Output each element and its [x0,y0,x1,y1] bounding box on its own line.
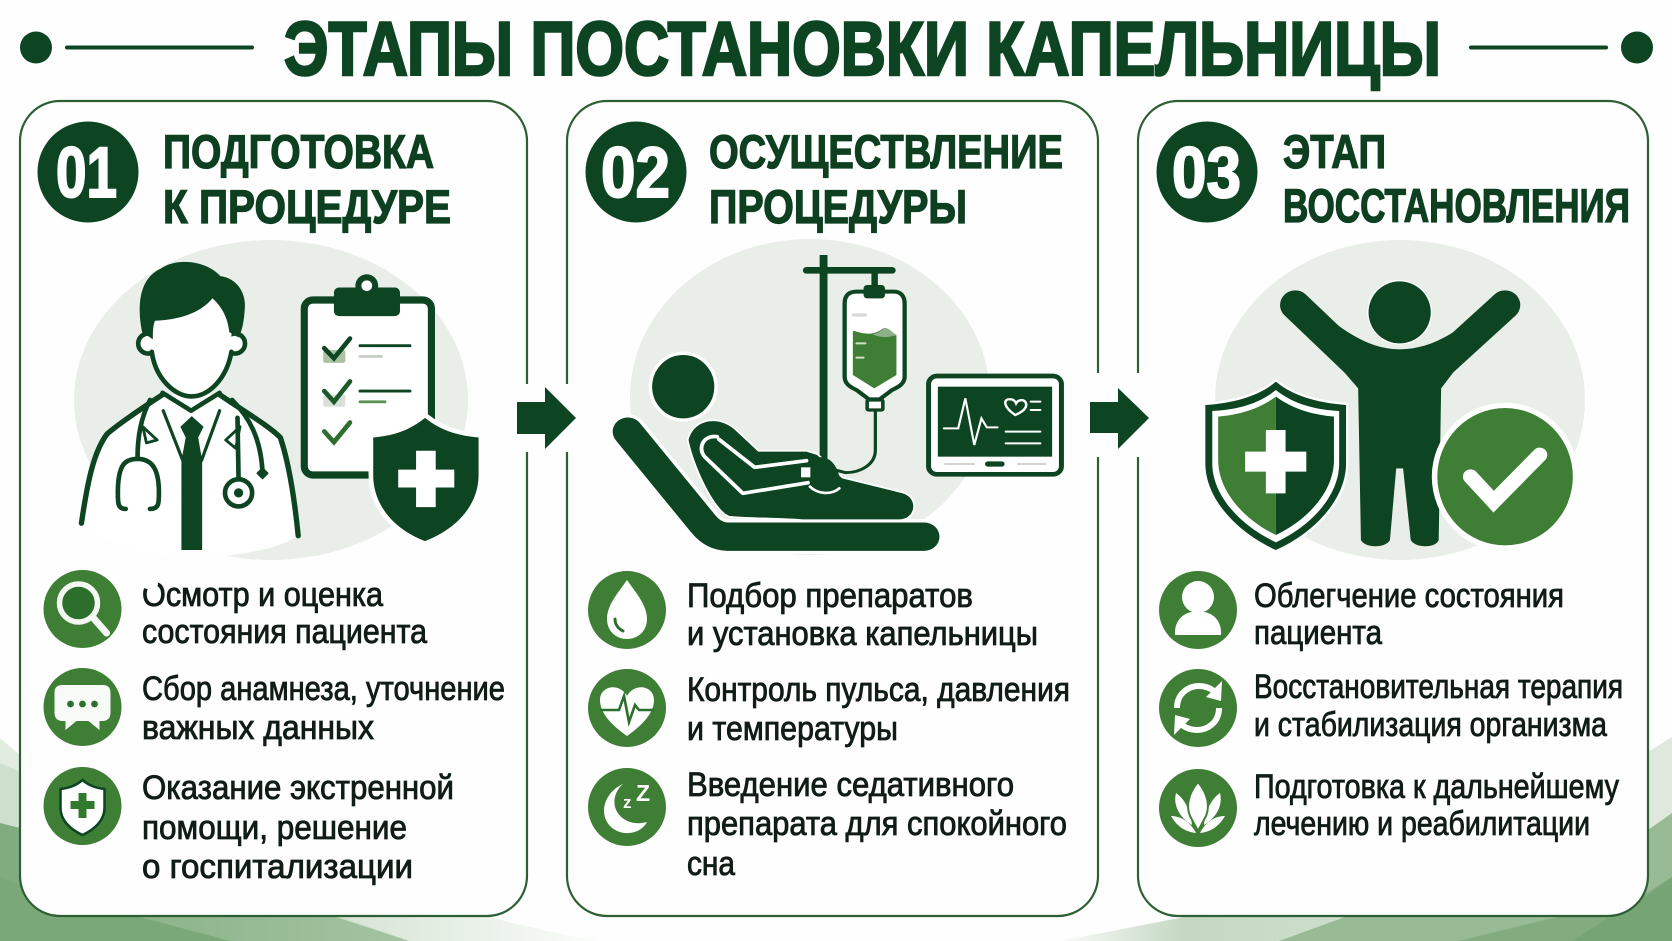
item 1 text [687,577,1038,653]
illustration: doctor [81,262,298,557]
illustration: check badge [1432,403,1578,551]
item 3 text [1254,768,1619,843]
item 1 icon: drop [588,571,666,649]
step badge 01 [38,122,138,222]
step badge 03 [1156,122,1258,222]
item 3 text: помощи, решение [142,809,407,847]
title ornament right [1469,32,1653,64]
item 2 icon: refresh [1159,669,1237,747]
item 1 text: и установка капельницы [687,615,1038,653]
item 2 text [687,671,1070,748]
title ornament left [20,32,254,64]
step badge 02 [586,122,686,222]
item 3 text [142,769,454,886]
item 3 text: Оказание экстренной [142,769,454,807]
heading: preparation: ПОДГОТОВКА [163,125,434,178]
item 1 icon: person [1159,571,1237,649]
heading: procedure [709,125,1063,233]
arrow: step 1 to 2 [514,384,581,452]
item 2 text: Контроль пульса, давления [687,671,1070,709]
illustration: shield with cross [373,418,479,541]
item 3 icon: moon and sleep: Z [636,780,650,806]
item 2 text: важных данных [142,709,374,747]
item 1 text: Подбор препаратов [687,577,973,615]
item 2 text [142,670,505,747]
item 3 text: о госпитализации [142,848,413,886]
item 1 text: пациента [1254,614,1382,652]
item 1 text: состояния пациента [142,613,427,651]
item 1 text [140,576,427,651]
item 2 text: и стабилизация организма [1254,706,1607,744]
heading: recovery [1283,125,1630,232]
item 1 text: Облегчение состояния [1254,577,1564,615]
illustration: patient with IV drip [628,255,924,537]
item 3 text: лечению и реабилитации [1254,805,1590,843]
illustration backdrop [630,239,990,555]
item 2 text: Сбор анамнеза, уточнение [142,670,505,708]
step badge 01: 01 [56,134,117,213]
heading: preparation: К ПРОЦЕДУРЕ [163,180,451,233]
item 2 text: и температуры [687,710,898,748]
title [20,7,1653,92]
item 1 icon: magnifier [44,570,122,648]
heading: procedure: ПРОЦЕДУРЫ [709,180,967,233]
item 3 text [687,766,1067,883]
heading: recovery: ЭТАП [1283,125,1386,178]
panel: recovery [1138,101,1648,916]
item 3 icon: lotus [1159,769,1237,847]
item 3 text: Введение седативного [687,766,1014,804]
item 2 icon: heart pulse [588,669,666,747]
item 1 text: Осмотр и оценка [142,576,383,614]
item 3 icon: shield [44,767,122,845]
illustration: patient monitor [929,376,1061,474]
illustration: clipboard checklist [304,274,431,475]
illustration: two-tone shield [1205,382,1346,550]
item 3 text: препарата для спокойного [687,805,1067,843]
illustration: recovered person [1295,281,1505,546]
heading: preparation [163,125,451,233]
item 2 icon: chat [44,668,122,746]
heading: procedure: ОСУЩЕСТВЛЕНИЕ [709,125,1063,178]
panel: procedure [567,101,1098,916]
item 3 icon: moon and sleep [588,768,666,846]
item 3 text: сна [687,845,735,883]
arrow: step 2 to 3 [1086,373,1153,457]
step badge 03: 03 [1172,134,1241,213]
item 1 text [1254,577,1564,652]
illustration backdrop [1215,240,1585,560]
title text: ЭТАПЫ ПОСТАНОВКИ КАПЕЛЬНИЦЫ [284,7,1441,92]
illustration backdrop [74,240,468,560]
item 3 icon: moon and sleep: z [623,793,632,812]
item 2 text [1254,668,1623,744]
step badge 02: 02 [601,134,670,213]
panel: preparation [20,101,527,916]
